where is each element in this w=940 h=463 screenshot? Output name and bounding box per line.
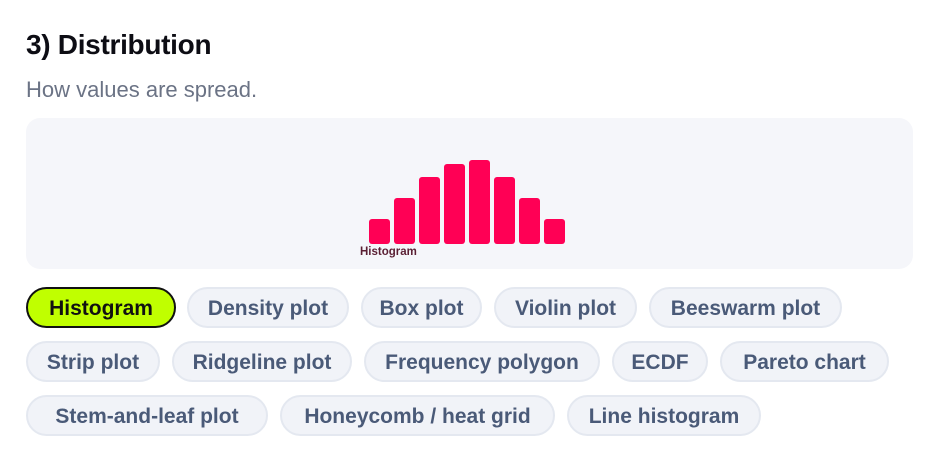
chip: Ridgeline plot	[172, 341, 352, 382]
chip: Violin plot	[494, 287, 637, 328]
subtitle: How values are spread.	[26, 77, 257, 102]
chip: Histogram	[26, 287, 176, 328]
chip: Ridgeline plot: Ridgeline plot	[193, 350, 331, 374]
chip: Density plot	[187, 287, 349, 328]
chip: Line histogram	[567, 395, 761, 436]
chip: ECDF	[612, 341, 708, 382]
chip: Strip plot	[26, 341, 160, 382]
chip: Stem-and-leaf plot: Stem-and-leaf plot	[55, 404, 239, 428]
chip: Pareto chart	[720, 341, 889, 382]
chip: ECDF: ECDF	[631, 350, 689, 374]
chip: Frequency polygon: Frequency polygon	[385, 350, 579, 374]
chip: Box plot	[361, 287, 482, 328]
chip: Box plot: Box plot	[380, 296, 464, 320]
chip: Honeycomb / heat grid: Honeycomb / heat grid	[304, 404, 531, 428]
chip: Density plot: Density plot	[208, 296, 328, 320]
chip: Violin plot: Violin plot	[515, 296, 616, 320]
chip: Strip plot: Strip plot	[47, 350, 139, 374]
chip: Beeswarm plot: Beeswarm plot	[671, 296, 820, 320]
chip: Beeswarm plot	[649, 287, 842, 328]
chip: Line histogram: Line histogram	[589, 404, 739, 428]
chip: Stem-and-leaf plot	[26, 395, 268, 436]
title: 3) Distribution	[26, 29, 211, 60]
chip: Pareto chart: Pareto chart	[743, 350, 866, 374]
histogram chart	[360, 160, 565, 258]
chip: Honeycomb / heat grid	[280, 395, 555, 436]
chip: Frequency polygon	[364, 341, 600, 382]
histogram chart: Histogram	[360, 246, 417, 258]
panel: chart preview	[26, 118, 913, 269]
chip: Histogram: Histogram	[49, 296, 153, 320]
